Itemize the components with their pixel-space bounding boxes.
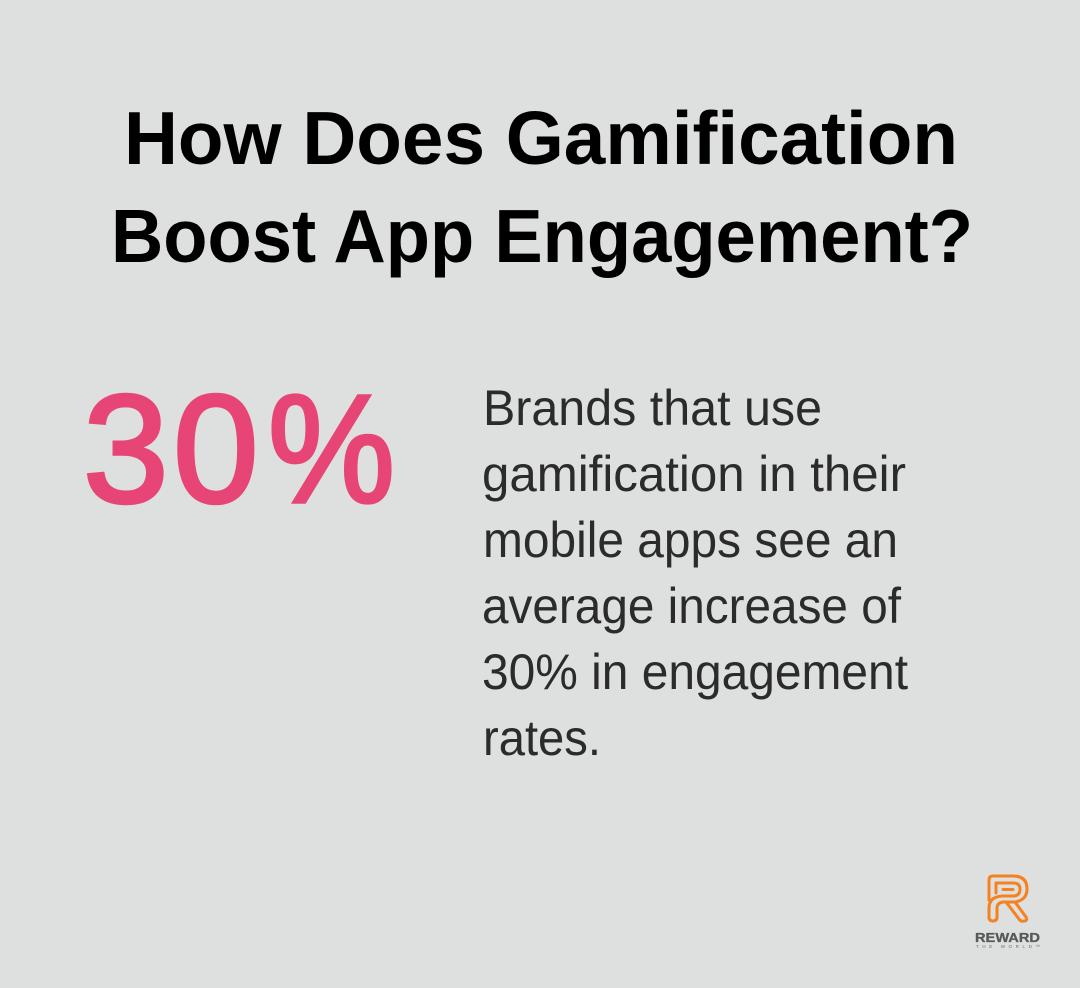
title: How Does Gamification (124, 96, 958, 180)
logo: Reward the World (975, 876, 1040, 949)
big stat: 30%: 3 (83, 363, 169, 535)
title: Boost App Engagement? (111, 194, 973, 278)
description text: mobile apps see an (483, 512, 898, 568)
description text: 30% in engagement (482, 644, 908, 700)
title (111, 96, 973, 278)
logo tagline: THE WORLD™ (976, 944, 1040, 949)
big stat: 30% (83, 363, 395, 535)
description text: Brands that use (483, 380, 822, 436)
big stat: 30%: % (268, 363, 395, 535)
description text: rates. (483, 710, 601, 766)
description text: gamification in their (482, 446, 906, 502)
big stat: 30%: 0 (173, 363, 259, 535)
icon: orange R mark (989, 876, 1027, 921)
logo wordmark: REWARD (975, 931, 1040, 945)
description text (482, 380, 908, 766)
description text: average increase of (482, 578, 901, 634)
